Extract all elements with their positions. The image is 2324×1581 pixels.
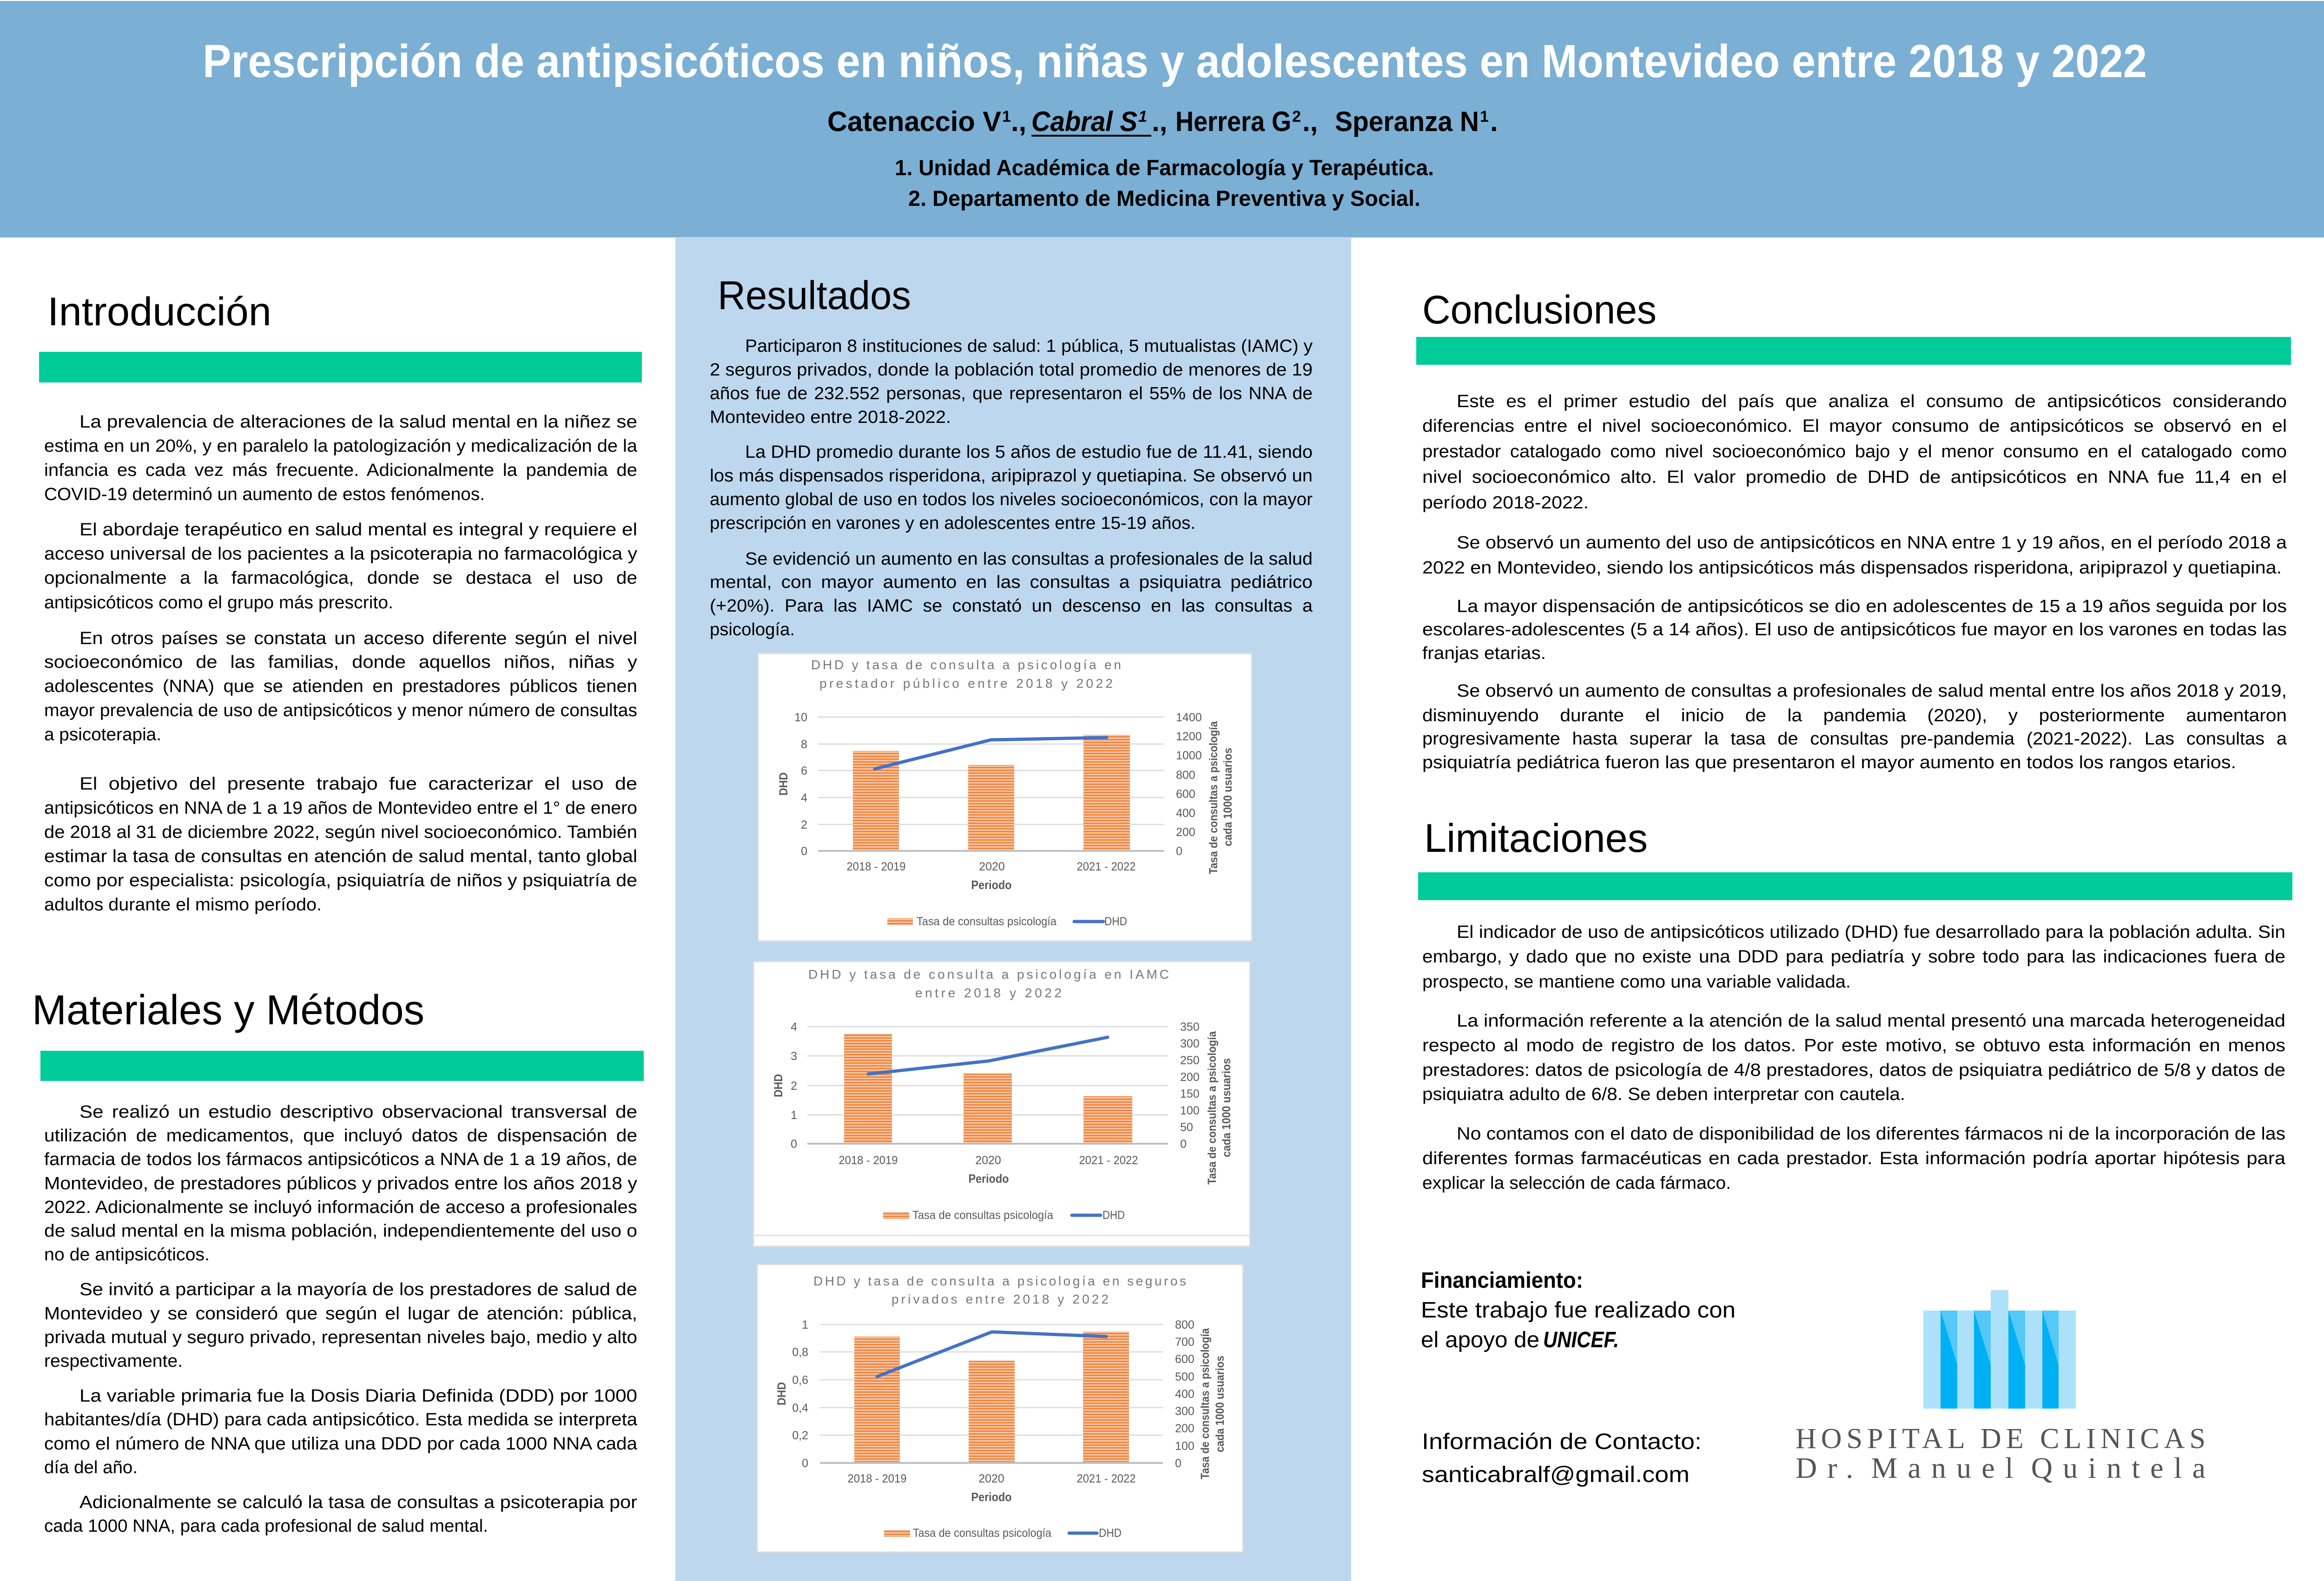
text block: methods: no de antipsicóticos. bbox=[44, 1245, 210, 1265]
x axis labels: 2021 - 2022 bbox=[1079, 1154, 1138, 1167]
text block: results: La DHD promedio durante los 5 años de estudio fue de 11.41, siendo bbox=[745, 442, 1313, 462]
text block: results: 2 seguros privados, donde la población total promedio de menores de 19 bbox=[710, 360, 1313, 380]
right axis labels: 1400 bbox=[1176, 711, 1202, 724]
panel: results background bbox=[675, 237, 1351, 1581]
left axis labels: 10 bbox=[794, 711, 807, 724]
text block: conclusions: progresivamente hasta superar la tasa de consultas pre-pandemia (2021-2022). Las consultas a bbox=[1422, 729, 2287, 749]
chart: prestador público bbox=[758, 653, 1252, 941]
text block: limitations: explicar la selección de cada fármaco. bbox=[1422, 1173, 1731, 1193]
text block: methods: Montevideo y se consideró que según el lugar de atención: pública, bbox=[44, 1304, 637, 1324]
text block: methods: privada mutual y seguro privado, representan niveles bajo, medio y alto bbox=[44, 1328, 637, 1347]
left axis labels: 8 bbox=[801, 738, 807, 751]
left axis labels bbox=[794, 711, 807, 858]
text block: funding: UNICEF. bbox=[1543, 1328, 1619, 1352]
left axis labels bbox=[791, 1021, 797, 1151]
axis title: tasa de consultas: Tasa de consultas a psicología bbox=[1206, 1031, 1219, 1185]
text block: conclusions bbox=[1422, 392, 2287, 772]
logo text bbox=[1796, 1423, 2205, 1484]
right axis labels: 400 bbox=[1175, 1388, 1195, 1401]
text block: limitations: La información referente a la atención de la salud mental presentó una marcada heterogeneidad bbox=[1457, 1011, 2285, 1031]
chart title bbox=[808, 967, 1169, 1000]
legend: Tasa de consultas psicología bbox=[917, 915, 1056, 928]
left axis labels: 2 bbox=[791, 1080, 797, 1093]
text block: results: (+20%). Para las IAMC se constató un descenso en las consultas a bbox=[710, 596, 1313, 616]
heading: Materiales y Métodos: Materiales y Métodos bbox=[32, 987, 424, 1034]
text block: conclusions: escolares-adolescentes (5 a 14 años). El uso de antipsicóticos fue mayor en los varones en todas las bbox=[1422, 620, 2287, 639]
text block: conclusions: franjas etarias. bbox=[1422, 644, 1546, 663]
affiliation 1: 1. Unidad Académica de Farmacología y Terapéutica. bbox=[895, 155, 1434, 180]
heading: Introducción: Introducción bbox=[47, 290, 271, 334]
text block: conclusions: diferencias entre el nivel socioeconómico. El mayor consumo de antipsicóticos se observó en el bbox=[1422, 416, 2287, 436]
DHD line bbox=[877, 1332, 1106, 1377]
logo text: Dr. Manuel Quintela bbox=[1796, 1451, 2205, 1484]
authors: ., bbox=[1011, 106, 1026, 137]
text block: limitations: diferentes formas farmacéuticas en cada prestador. Esta información podría aportar hipótesis para bbox=[1422, 1149, 2286, 1168]
axis title: tasa de consultas: cada 1000 usuarios bbox=[1221, 748, 1235, 846]
left axis labels bbox=[792, 1318, 808, 1470]
left axis labels: 1 bbox=[791, 1109, 797, 1122]
chart title: DHD y tasa de consulta a psicología en IAMC bbox=[808, 967, 1169, 982]
logo: Hospital de Clínicas bbox=[1796, 1290, 2205, 1484]
right axis labels bbox=[1180, 1021, 1200, 1151]
axis title: DHD: DHD bbox=[775, 1382, 788, 1405]
chart title: prestador público entre 2018 y 2022 bbox=[819, 676, 1113, 691]
text block: funding: el apoyo de bbox=[1421, 1328, 1539, 1352]
right axis labels: 200 bbox=[1175, 1422, 1195, 1435]
axis title: tasa de consultas bbox=[1207, 721, 1235, 874]
x axis labels: 2021 - 2022 bbox=[1076, 1472, 1136, 1485]
heading bar: Conclusiones bbox=[1416, 337, 2291, 365]
bars bbox=[844, 1034, 1132, 1144]
text block: introduction: adolescentes (NNA) que se atienden en prestadores públicos tienen bbox=[44, 677, 637, 696]
authors: 1 bbox=[1002, 108, 1011, 125]
axis title: tasa de consultas: Tasa de consultas a psicología bbox=[1199, 1328, 1212, 1479]
heading bar: Limitaciones bbox=[1418, 872, 2292, 900]
text block: conclusions: nivel socioeconómico alto. El valor promedio de DHD de antipsicóticos en NNA fue 11,4 en el bbox=[1422, 468, 2287, 487]
authors bbox=[827, 106, 1498, 137]
grid lines bbox=[820, 1324, 1163, 1435]
left axis labels: 0,6 bbox=[792, 1374, 808, 1387]
text block: methods: día del año. bbox=[44, 1458, 138, 1477]
right axis labels: 500 bbox=[1175, 1370, 1195, 1383]
text block: introduction: acceso universal de los pacientes a la psicoterapia no farmacológica y bbox=[44, 544, 637, 564]
right axis labels: 0 bbox=[1176, 845, 1182, 858]
text block: conclusions: disminuyendo durante el inicio de la pandemia (2020), y posteriormente aumentaron bbox=[1422, 706, 2287, 725]
text block: results: Montevideo entre 2018-2022. bbox=[710, 408, 951, 427]
text block: introduction: El objetivo del presente trabajo fue caracterizar el uso de bbox=[79, 774, 637, 794]
text block: introduction: a psicoterapia. bbox=[44, 725, 161, 744]
x axis labels: Periodo bbox=[971, 878, 1011, 892]
text block: results: los más dispensados risperidona, aripiprazol y quetiapina. Se observó un bbox=[710, 466, 1313, 486]
authors: ., bbox=[1302, 106, 1318, 137]
authors: Herrera G bbox=[1175, 106, 1291, 137]
x axis labels bbox=[838, 1154, 1138, 1186]
authors: . bbox=[1490, 106, 1498, 137]
text block: introduction: El abordaje terapéutico en salud mental es integral y requiere el bbox=[79, 520, 637, 540]
x axis labels: 2020 bbox=[975, 1154, 1001, 1167]
right axis labels: 0 bbox=[1175, 1457, 1182, 1470]
text block: methods: Se invitó a participar a la mayoría de los prestadores de salud de bbox=[79, 1280, 637, 1299]
text block: methods: habitantes/día (DHD) para cada antipsicótico. Esta medida se interpreta bbox=[44, 1410, 638, 1429]
right axis labels: 800 bbox=[1176, 769, 1195, 782]
text block: results bbox=[710, 336, 1313, 639]
right axis labels: 50 bbox=[1180, 1121, 1193, 1134]
legend: Tasa de consultas psicología bbox=[912, 1209, 1053, 1222]
heading bar: Introducción bbox=[39, 352, 642, 382]
authors: Cabral S bbox=[1031, 106, 1137, 137]
x axis labels bbox=[848, 1472, 1136, 1504]
right axis labels: 150 bbox=[1180, 1087, 1200, 1100]
text block: conclusions: psiquiatría pediátrica fueron las que presentaron el mayor aumento en todos los rangos etarios. bbox=[1422, 753, 2236, 772]
authors: ., bbox=[1152, 106, 1167, 137]
DHD line bbox=[875, 738, 1107, 769]
text block: methods: respectivamente. bbox=[44, 1351, 183, 1371]
right axis labels: 600 bbox=[1175, 1353, 1195, 1366]
text block: funding bbox=[1421, 1268, 1736, 1352]
axis title: tasa de consultas bbox=[1206, 1031, 1233, 1185]
chart title: DHD y tasa de consulta a psicología en seguros bbox=[813, 1274, 1186, 1288]
text block: methods: Se realizó un estudio descriptivo observacional transversal de bbox=[79, 1102, 637, 1122]
legend bbox=[884, 1527, 1122, 1540]
right axis labels: 700 bbox=[1175, 1336, 1195, 1349]
text block: contact: santicabralf@gmail.com bbox=[1422, 1462, 1690, 1487]
right axis labels: 250 bbox=[1180, 1054, 1200, 1067]
text block: introduction: estima en un 20%, y en paralelo la patologización y medicalización de la bbox=[44, 436, 638, 456]
right axis labels: 200 bbox=[1180, 1071, 1200, 1084]
header band bbox=[0, 1, 2324, 237]
authors: Catenaccio V bbox=[827, 106, 1001, 137]
chart: IAMC bbox=[753, 962, 1250, 1246]
text block: introduction: como por especialista: psicología, psiquiatría de niños y psiquiatría de bbox=[44, 871, 637, 890]
text block: funding: Este trabajo fue realizado con bbox=[1421, 1298, 1736, 1323]
text block: limitations: No contamos con el dato de disponibilidad de los diferentes fármacos ni de la incorporación de las bbox=[1457, 1124, 2285, 1144]
grid lines bbox=[807, 1027, 1168, 1115]
authors: 1 bbox=[1138, 108, 1147, 125]
axis title: tasa de consultas: cada 1000 usuarios bbox=[1220, 1058, 1233, 1157]
right axis labels bbox=[1176, 711, 1202, 858]
x axis labels: 2020 bbox=[978, 1472, 1004, 1485]
text block: contact: Información de Contacto: bbox=[1422, 1429, 1702, 1454]
text block: limitations: psiquiatra adulto de 6/8. Se deben interpretar con cautela. bbox=[1422, 1085, 1905, 1104]
text block: limitations: respecto al modo de registro de los datos. Por este motivo, se obtuvo esta información en menos bbox=[1422, 1036, 2285, 1055]
left axis labels: 0,2 bbox=[792, 1429, 808, 1442]
text block: methods: Adicionalmente se calculó la tasa de consultas a psicoterapia por bbox=[79, 1493, 637, 1512]
text block: limitations: embargo, y dado que no existe una DDD para pediatría y sobre todo para las indicaciones fuera de bbox=[1422, 947, 2285, 967]
text block: results: mental, con mayor aumento en las consultas a psiquiatra pediátrico bbox=[710, 573, 1313, 592]
text block: methods: cada 1000 NNA, para cada profesional de salud mental. bbox=[44, 1516, 488, 1536]
text block: limitations bbox=[1422, 922, 2286, 1193]
legend: DHD bbox=[1103, 1209, 1125, 1222]
text block: methods: La variable primaria fue la Dosis Diaria Definida (DDD) por 1000 bbox=[79, 1386, 637, 1406]
text block: limitations: prestadores: datos de psicología de 4/8 prestadores, datos de psiquiatra pediátrico de 5/8 y datos de bbox=[1422, 1061, 2285, 1080]
text block: results: Se evidenció un aumento en las consultas a profesionales de la salud bbox=[745, 549, 1313, 569]
left axis labels: 4 bbox=[801, 791, 807, 804]
text block: methods: 2022. Adicionalmente se incluyó información de acceso a profesionales bbox=[44, 1198, 637, 1217]
axis title: tasa de consultas bbox=[1199, 1328, 1227, 1479]
heading: Limitaciones: Limitaciones bbox=[1424, 816, 1648, 861]
right axis labels: 350 bbox=[1180, 1021, 1200, 1034]
x axis labels bbox=[847, 860, 1136, 892]
left axis labels: 0,8 bbox=[792, 1346, 808, 1359]
text block: methods: Montevideo, de prestadores públicos y privados entre los años 2018 y bbox=[44, 1174, 637, 1193]
heading: Resultados: Resultados bbox=[718, 273, 911, 318]
right axis labels: 100 bbox=[1180, 1104, 1200, 1117]
left axis labels: 0 bbox=[801, 845, 807, 858]
text block: methods bbox=[44, 1102, 638, 1536]
right axis labels: 300 bbox=[1180, 1037, 1200, 1050]
text block: methods: utilización de medicamentos, que incluyó datos de dispensación de bbox=[44, 1126, 637, 1146]
axis title: DHD: DHD bbox=[772, 1074, 785, 1097]
left axis labels: 1 bbox=[802, 1318, 808, 1331]
text block: introduction: La prevalencia de alteraciones de la salud mental en la niñez se bbox=[79, 412, 637, 432]
text block: contact bbox=[1422, 1429, 1702, 1487]
icon: building bbox=[1923, 1290, 2076, 1409]
axis title: DHD: DHD bbox=[777, 772, 790, 796]
right axis labels: 600 bbox=[1176, 788, 1195, 801]
left axis labels: 6 bbox=[801, 764, 807, 777]
text block: results: aumento global de uso en todos los niveles socioeconómicos, con la mayor bbox=[710, 490, 1313, 509]
x axis labels: Periodo bbox=[971, 1490, 1011, 1504]
text block: results: Participaron 8 instituciones de salud: 1 pública, 5 mutualistas (IAMC) y bbox=[745, 336, 1313, 356]
text block: conclusions: Se observó un aumento de consultas a profesionales de salud mental entre los años 2018 y 2019, bbox=[1457, 681, 2287, 701]
text block: conclusions: La mayor dispensación de antipsicóticos se dio en adolescentes de 15 a 19 años seguida por los bbox=[1457, 597, 2287, 616]
authors: 2 bbox=[1292, 108, 1301, 125]
chart title bbox=[813, 1274, 1186, 1306]
text block: conclusions: Este es el primer estudio del país que analiza el consumo de antipsicóticos considerando bbox=[1457, 392, 2287, 411]
right axis labels: 0 bbox=[1180, 1138, 1187, 1151]
authors: 1 bbox=[1480, 108, 1489, 125]
text block: introduction: infancia es cada vez más frecuente. Adicionalmente la pandemia de bbox=[44, 461, 637, 480]
axis title: tasa de consultas: Tasa de consultas a psicología bbox=[1207, 721, 1220, 874]
x axis labels: 2018 - 2019 bbox=[847, 860, 905, 873]
left axis labels: 0 bbox=[791, 1138, 797, 1151]
right axis labels: 300 bbox=[1175, 1405, 1195, 1418]
chart title: entre 2018 y 2022 bbox=[915, 986, 1062, 1000]
heading: Conclusiones: Conclusiones bbox=[1422, 288, 1657, 332]
text block: conclusions: Se observó un aumento del uso de antipsicóticos en NNA entre 1 y 19 años, en el período 2018 a bbox=[1457, 533, 2287, 553]
authors: Speranza N bbox=[1335, 106, 1479, 137]
chart title: privados entre 2018 y 2022 bbox=[891, 1292, 1109, 1306]
x axis labels: 2020 bbox=[979, 860, 1005, 873]
text block: introduction: En otros países se constata un acceso diferente según el nivel bbox=[79, 629, 637, 648]
legend: DHD bbox=[1104, 915, 1127, 928]
x axis labels: 2018 - 2019 bbox=[838, 1154, 898, 1167]
legend bbox=[887, 915, 1127, 928]
text block: methods: como el número de NNA que utiliza una DDD por cada 1000 NNA cada bbox=[44, 1434, 638, 1454]
text block: introduction: COVID-19 determinó un aumento de estos fenómenos. bbox=[44, 485, 485, 504]
grid lines bbox=[818, 717, 1164, 824]
right axis labels: 400 bbox=[1176, 807, 1195, 820]
DHD line bbox=[868, 1037, 1108, 1074]
right axis labels: 1000 bbox=[1176, 749, 1202, 762]
right axis labels: 100 bbox=[1175, 1440, 1195, 1453]
legend: Tasa de consultas psicología bbox=[913, 1527, 1051, 1540]
text block: introduction: de 2018 al 31 de diciembre 2022, según nivel socioeconómico. También bbox=[44, 823, 637, 842]
text block: introduction: estimar la tasa de consultas en atención de salud mental, tanto global bbox=[44, 847, 637, 866]
axis title: tasa de consultas: cada 1000 usuarios bbox=[1214, 1356, 1227, 1452]
legend: DHD bbox=[1099, 1527, 1122, 1540]
text block: conclusions: prestador catalogado como nivel socioeconómico bajo y el menor consumo en el catalogado como bbox=[1422, 442, 2287, 461]
text block: limitations: El indicador de uso de antipsicóticos utilizado (DHD) fue desarrollado para la población adulta. Sin bbox=[1457, 922, 2285, 942]
x axis labels: 2018 - 2019 bbox=[848, 1472, 906, 1485]
x axis labels: Periodo bbox=[969, 1172, 1009, 1186]
text block: introduction bbox=[44, 412, 638, 915]
left axis labels: 2 bbox=[801, 818, 807, 831]
text block: results: psicología. bbox=[710, 620, 795, 639]
text block: results: años fue de 232.552 personas, que representaron el 55% de los NNA de bbox=[710, 384, 1313, 403]
left axis labels: 0,4 bbox=[792, 1402, 808, 1415]
left axis labels: 4 bbox=[791, 1021, 797, 1034]
legend bbox=[883, 1209, 1125, 1222]
x axis labels: 2021 - 2022 bbox=[1076, 860, 1136, 873]
title: Prescripción de antipsicóticos en niños, niñas y adolescentes en Montevideo entre 2018 y 2022 bbox=[203, 35, 2147, 87]
text block: introduction: antipsicóticos como el grupo más prescrito. bbox=[44, 593, 393, 613]
bars bbox=[854, 1331, 1129, 1463]
chart title bbox=[811, 658, 1121, 691]
text block: funding: Financiamiento: bbox=[1421, 1268, 1583, 1293]
text block: conclusions: 2022 en Montevideo, siendo los antipsicóticos más dispensados risperidona, aripiprazol y quetiapina. bbox=[1422, 558, 2282, 578]
right axis labels: 200 bbox=[1176, 826, 1195, 839]
right axis labels: 800 bbox=[1175, 1318, 1195, 1331]
text block: methods: de salud mental en la misma población, independientemente del uso o bbox=[44, 1221, 637, 1241]
affiliation 2: 2. Departamento de Medicina Preventiva y Social. bbox=[908, 186, 1420, 211]
bars bbox=[853, 735, 1130, 851]
text block: methods: farmacia de todos los fármacos antipsicóticos a NNA de 1 a 19 años, de bbox=[44, 1150, 637, 1169]
text block: introduction: opcionalmente a la farmacológica, donde se destaca el uso de bbox=[44, 568, 637, 588]
left axis labels: 3 bbox=[791, 1050, 797, 1063]
text block: introduction: socioeconómico de las familias, donde aquellos niños, niñas y bbox=[44, 652, 637, 672]
chart title: DHD y tasa de consulta a psicología en bbox=[811, 658, 1121, 672]
right axis labels: 1200 bbox=[1176, 730, 1202, 743]
text block: conclusions: período 2018-2022. bbox=[1422, 493, 1589, 513]
logo text: HOSPITAL DE CLINICAS bbox=[1796, 1423, 2205, 1455]
chart: seguros privados bbox=[757, 1265, 1243, 1552]
text block: limitations: prospecto, se mantiene como una variable validada. bbox=[1422, 972, 1851, 992]
text block: introduction: mayor prevalencia de uso de antipsicóticos y menor número de consultas bbox=[44, 701, 637, 720]
left axis labels: 0 bbox=[802, 1457, 808, 1470]
heading bar: Materiales y Métodos bbox=[40, 1051, 644, 1081]
text block: introduction: antipsicóticos en NNA de 1 a 19 años de Montevideo entre el 1° de enero bbox=[44, 798, 637, 818]
text block: results: prescripción en varones y en adolescentes entre 15-19 años. bbox=[710, 514, 1195, 533]
text block: introduction: adultos durante el mismo período. bbox=[44, 895, 322, 915]
right axis labels bbox=[1175, 1318, 1195, 1470]
